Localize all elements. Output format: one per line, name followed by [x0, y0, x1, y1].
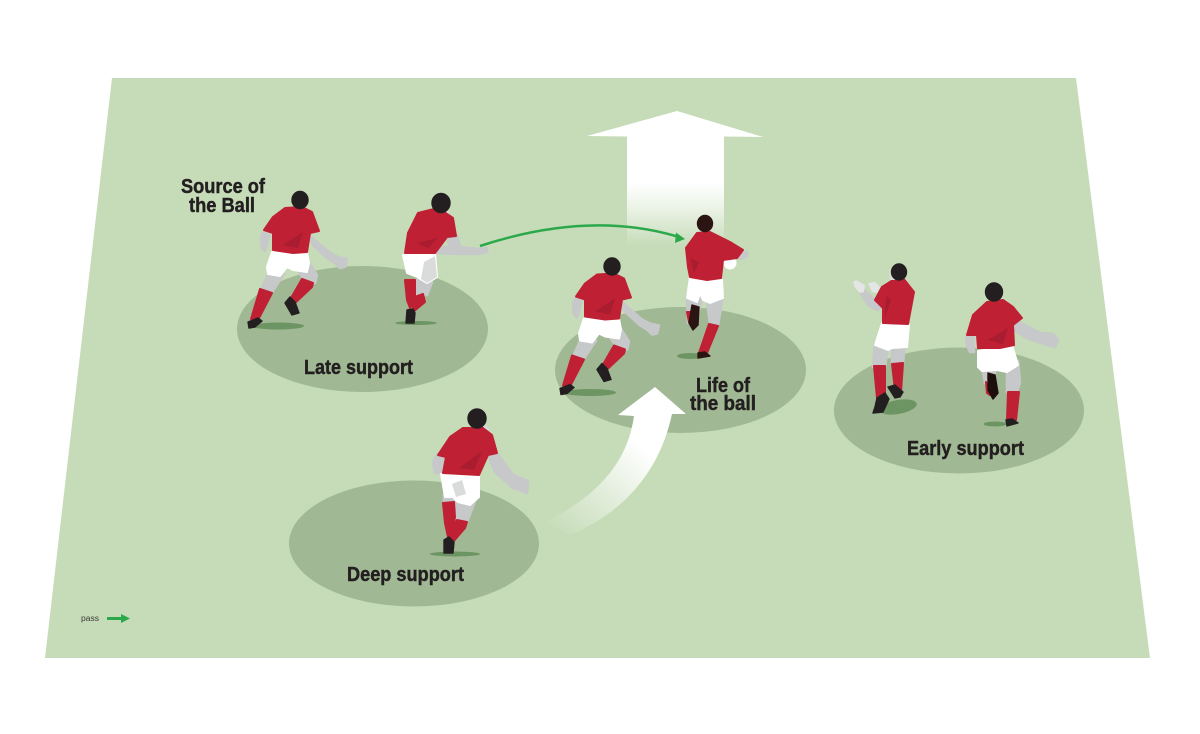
label: source of the ball: Source of — [181, 175, 265, 198]
label: source of the ball — [181, 175, 265, 217]
playing field — [45, 78, 1150, 658]
legend: pass — [81, 614, 130, 623]
player: source of the ball — [248, 192, 347, 330]
player: ball carrier — [677, 216, 747, 359]
player: early support running — [966, 283, 1058, 426]
label: life of the ball: the ball — [690, 392, 756, 415]
zone: life of the ball — [555, 307, 806, 433]
label: early support: Early support — [907, 437, 1024, 460]
label: life of the ball: Life of — [696, 374, 750, 397]
label: source of the ball: the Ball — [189, 194, 255, 217]
arrow: pass between players — [480, 225, 685, 246]
zone: deep support — [289, 480, 539, 606]
label: late support: Late support — [304, 356, 413, 379]
label: life of the ball — [690, 374, 756, 415]
player: deep support — [430, 409, 528, 556]
arrow: deep support running line — [545, 387, 686, 535]
zone: early support — [834, 348, 1084, 474]
legend: pass: pass — [81, 614, 99, 623]
label: deep support: Deep support — [347, 563, 464, 586]
arrow: forward direction — [587, 111, 763, 246]
zone: late support — [237, 266, 488, 392]
player: passer — [395, 194, 487, 325]
player: early support catching — [853, 264, 918, 417]
player: life of the ball support — [560, 258, 659, 396]
